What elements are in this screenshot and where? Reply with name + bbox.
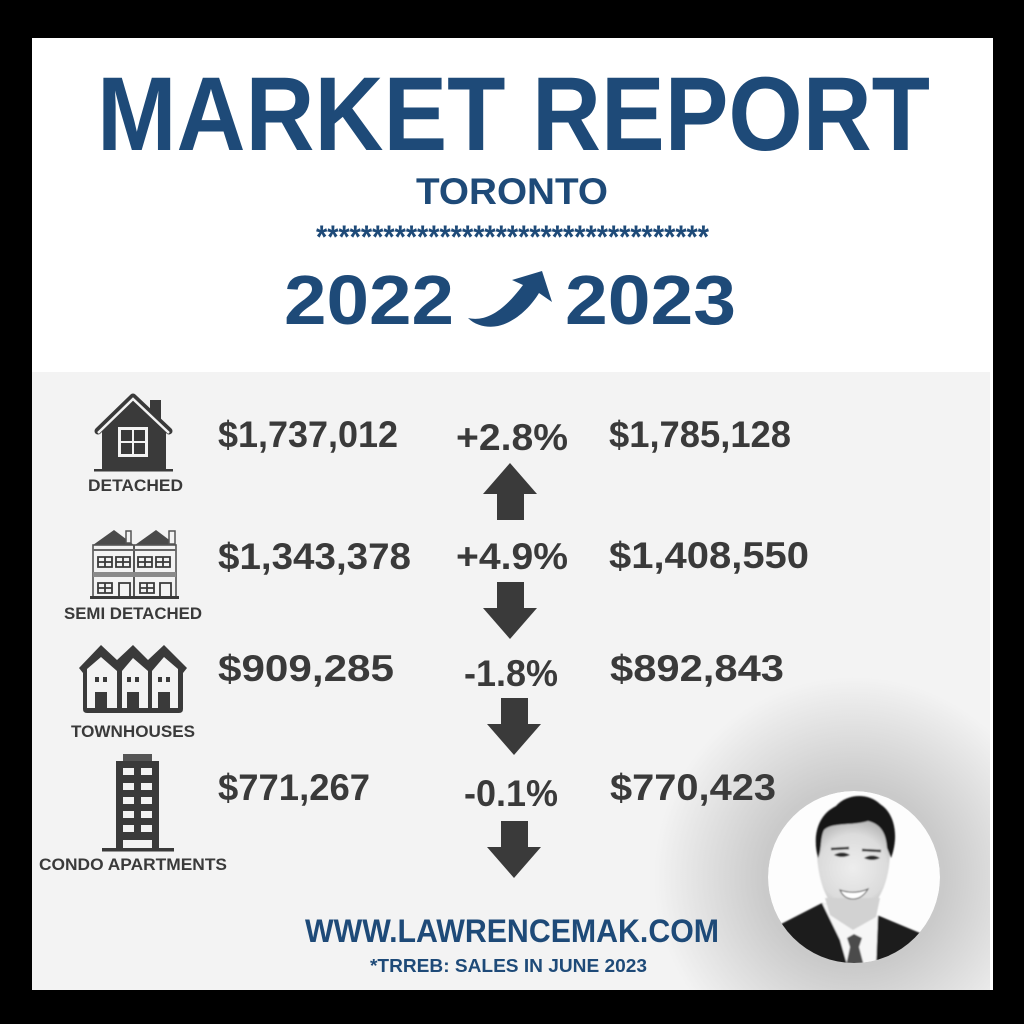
label: semi detached: SEMI DETACHED <box>64 604 202 623</box>
price 2023: semi detached: $1,408,550 <box>609 535 809 576</box>
panel: price data <box>32 372 990 990</box>
arrow: up <box>483 463 537 520</box>
price 2022: townhouses: $909,285 <box>218 648 394 689</box>
icon: rising arrow <box>468 271 552 327</box>
price 2022: condo: $771,267 <box>218 767 370 808</box>
price 2023: townhouses: $892,843 <box>610 648 784 689</box>
asterisk divider: *********************************** <box>316 219 709 255</box>
year 2022: 2022 <box>284 261 454 339</box>
price 2023: detached: $1,785,128 <box>609 414 791 455</box>
price 2022: detached: $1,737,012 <box>218 414 398 455</box>
year 2023: 2023 <box>565 261 736 339</box>
icon: detached house <box>94 397 173 472</box>
arrow: down <box>483 582 537 639</box>
icon: townhouses <box>79 645 187 713</box>
change: condo: -0.1% <box>464 773 558 814</box>
icon: condo tower <box>102 754 174 852</box>
icon: semi detached <box>90 530 179 599</box>
background glow <box>654 677 990 990</box>
price 2022: semi detached: $1,343,378 <box>218 536 411 577</box>
label: townhouses: TOWNHOUSES <box>71 722 195 741</box>
subtitle: city: TORONTO <box>416 171 608 212</box>
source note: *TRREB: SALES IN JUNE 2023 <box>370 956 647 976</box>
label: condo apartments: CONDO APARTMENTS <box>39 855 227 874</box>
title: MARKET REPORT <box>97 56 930 173</box>
label: detached: DETACHED <box>88 476 183 495</box>
change: detached: +2.8% <box>456 417 568 458</box>
price 2023: condo: $770,423 <box>610 767 776 808</box>
change: townhouses: -1.8% <box>464 653 558 694</box>
panel: header <box>97 56 930 339</box>
arrow: down <box>487 698 541 755</box>
portrait <box>768 791 940 963</box>
arrow: down <box>487 821 541 878</box>
website: WWW.LAWRENCEMAK.COM <box>305 913 719 949</box>
change: semi detached: +4.9% <box>456 536 568 577</box>
